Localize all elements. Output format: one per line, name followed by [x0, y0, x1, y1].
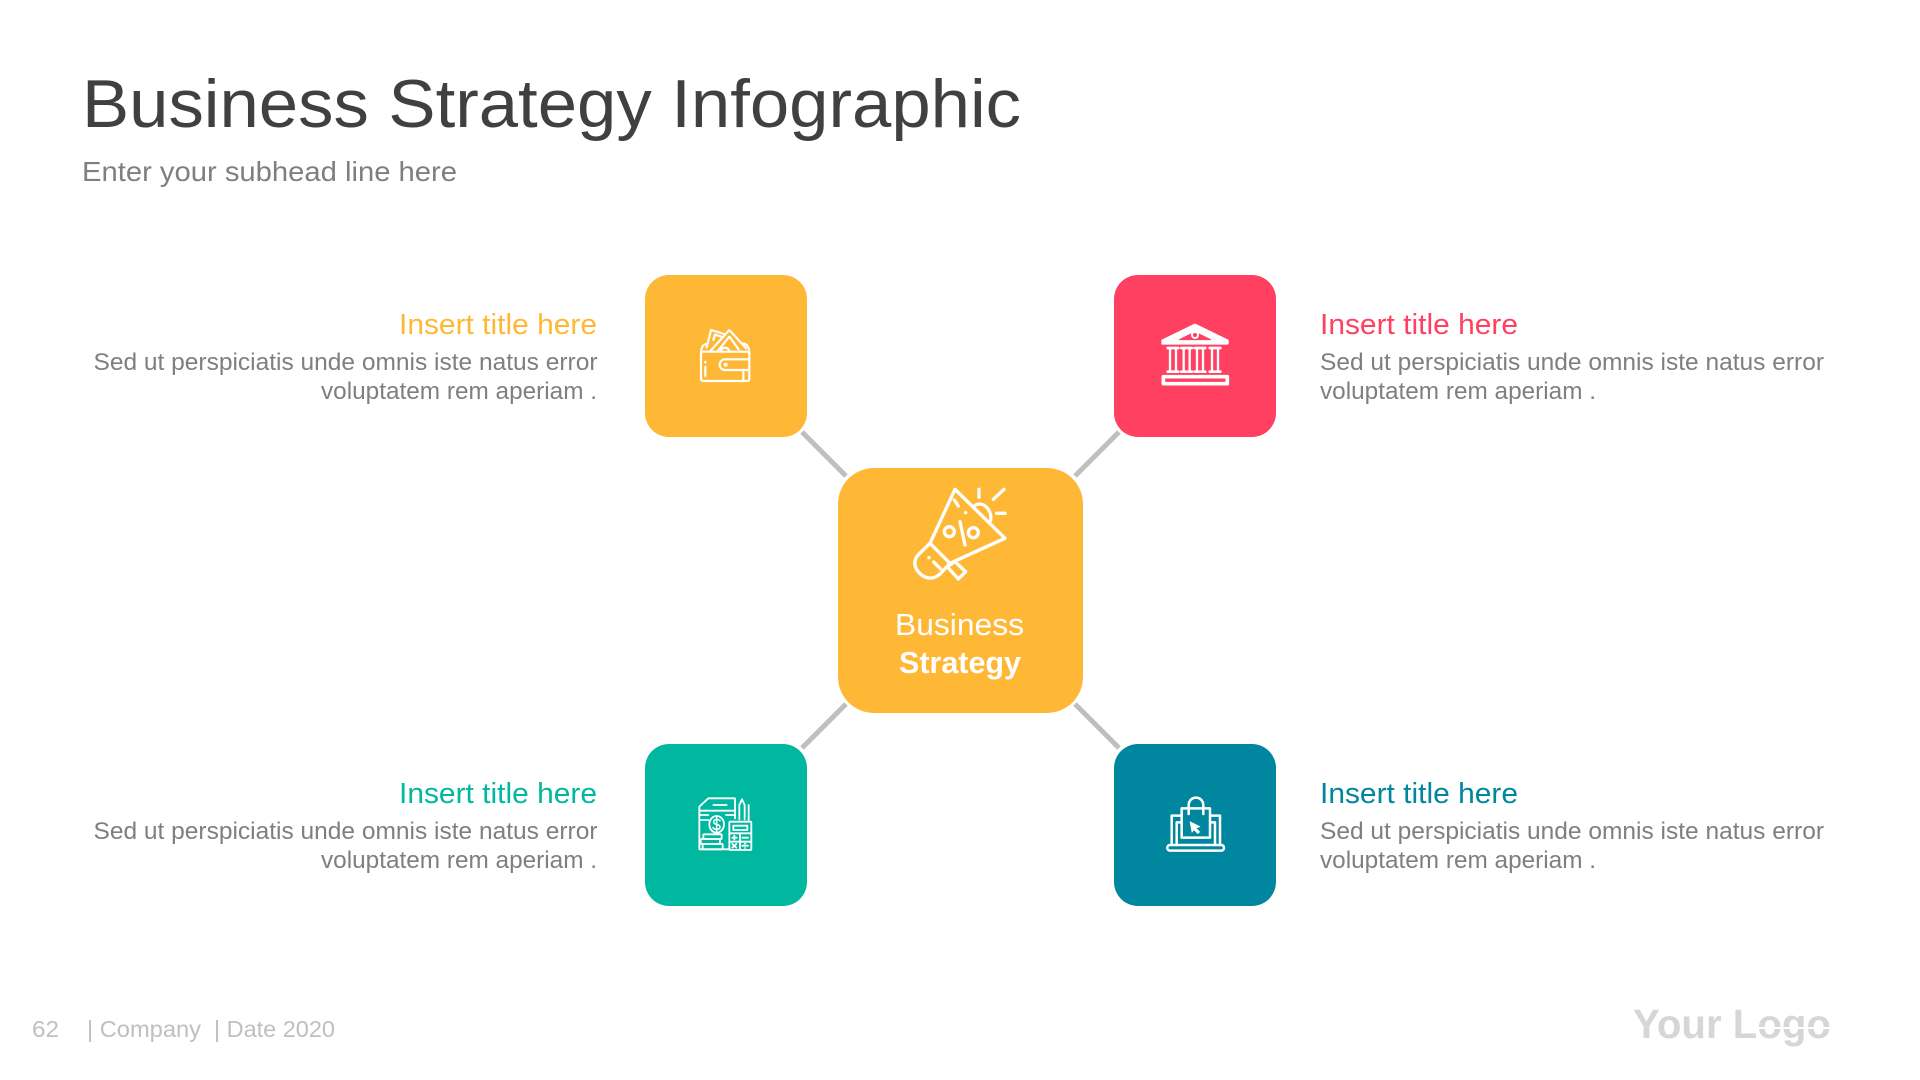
icon: finance documents and calculator: [699, 798, 751, 850]
item title: Insert title here: [399, 309, 597, 341]
title: Business Strategy Infographic: [82, 66, 1021, 142]
item body: voluptatem rem aperiam .: [321, 847, 597, 874]
central hub: Business Strategy: Strategy: [899, 645, 1022, 680]
connector lines: [802, 432, 1119, 748]
tile: [1114, 275, 1276, 437]
icon: wallet: [701, 330, 749, 381]
hub label: Business: [895, 607, 1024, 642]
footer: 62: [32, 1016, 59, 1042]
node: bottom right online shopping: [1114, 744, 1824, 906]
item title: Insert title here: [399, 778, 597, 810]
footer: [32, 1016, 335, 1042]
node: top left wallet: [94, 275, 807, 437]
footer: | Date 2020: [214, 1016, 335, 1042]
icon: bank: [1163, 325, 1227, 384]
hub tile: [838, 468, 1083, 713]
icon: shopping bag on laptop: [1167, 798, 1224, 851]
item body: voluptatem rem aperiam .: [321, 378, 597, 405]
tile: [645, 275, 807, 437]
node: top right bank: [1114, 275, 1824, 437]
logo: Your Logo: [1633, 1001, 1831, 1047]
item body: [1320, 349, 1824, 405]
item body: Sed ut perspiciatis unde omnis iste natus error: [94, 818, 598, 845]
item body: [94, 349, 598, 405]
footer: | Company: [87, 1016, 202, 1042]
item title: Insert title here: [1320, 778, 1518, 810]
item body: [1320, 818, 1824, 874]
subtitle: Enter your subhead line here: [82, 156, 457, 187]
item title: Insert title here: [1320, 309, 1518, 341]
tile: [1114, 744, 1276, 906]
central hub: Business Strategy: [838, 468, 1083, 713]
item body: Sed ut perspiciatis unde omnis iste natus error: [1320, 349, 1824, 376]
icon: megaphone: [915, 489, 1005, 579]
tile: [645, 744, 807, 906]
item body: Sed ut perspiciatis unde omnis iste natus error: [94, 349, 598, 376]
item body: voluptatem rem aperiam .: [1320, 847, 1596, 874]
item body: Sed ut perspiciatis unde omnis iste natus error: [1320, 818, 1824, 845]
item body: voluptatem rem aperiam .: [1320, 378, 1596, 405]
node: bottom left finance: [94, 744, 807, 906]
item body: [94, 818, 598, 874]
